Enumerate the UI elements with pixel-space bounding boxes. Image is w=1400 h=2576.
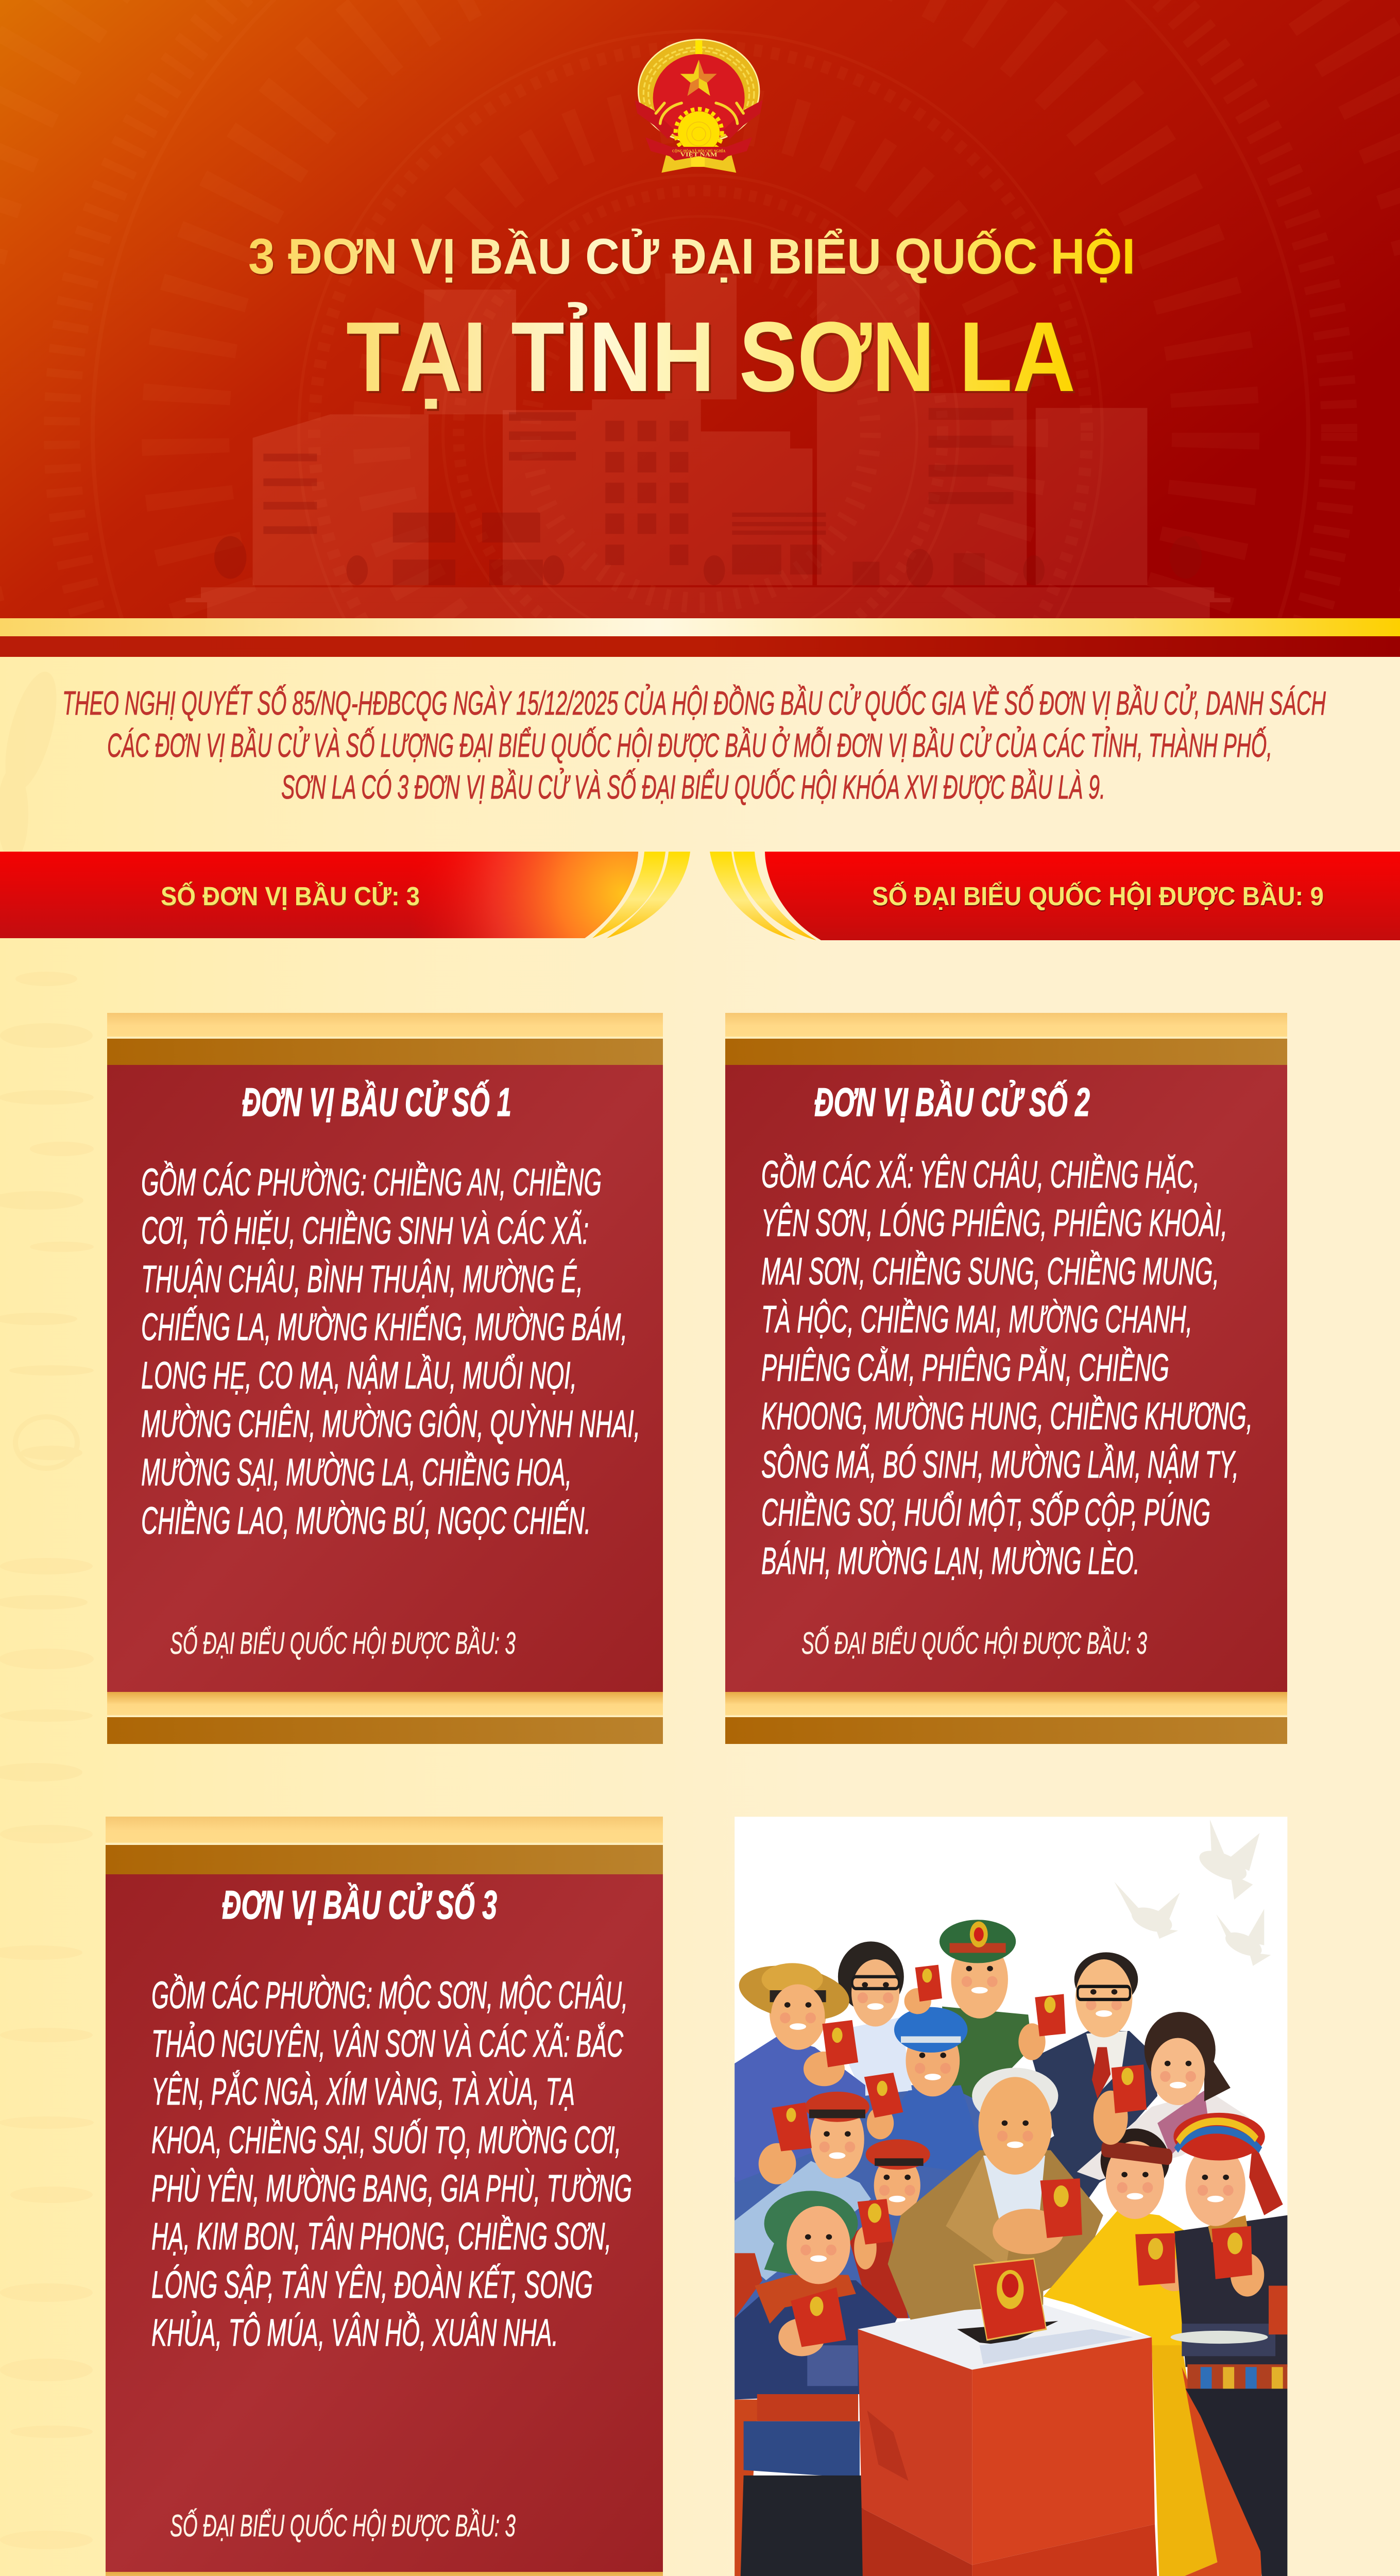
ballot box [858, 2304, 1159, 2576]
panel 1 body: CHIẾNG LA, MƯỜNG KHIẾNG, MƯỜNG BÁM, [141, 1306, 627, 1348]
national emblem: CỘNG HÒA XÃ HỘI CHỦ NGHĨA [672, 148, 726, 153]
small boy [848, 2210, 909, 2318]
national emblem: VIỆT NAM [680, 151, 718, 158]
panel 3 body: KHOA, CHIỀNG SẠI, SUỐI TỌ, MƯỜNG CƠI, [151, 2119, 621, 2161]
hands [759, 1988, 1128, 2269]
base [661, 155, 736, 173]
star [680, 60, 716, 96]
doves [1114, 1820, 1271, 1966]
banner [645, 138, 752, 161]
left ethnic woman [735, 2191, 897, 2576]
panel 1 body: CHIỀNG LAO, MƯỜNG BÚ, NGỌC CHIẾN. [141, 1499, 591, 1542]
panel 1 body: CƠI, TÔ HIỆU, CHIỀNG SINH VÀ CÁC XÃ: [141, 1209, 589, 1252]
red stripe [0, 636, 1400, 657]
right ribbon: number of deputies: SỐ ĐẠI BIỂU QUỐC HỘI ĐƯỢC BẦU: 9 [872, 881, 1324, 911]
gold stripe [0, 618, 1400, 636]
soldier [942, 2007, 1032, 2102]
left drum pattern background [0, 667, 94, 2576]
panel: constituency 2 [725, 1013, 1287, 1744]
helmet worker [878, 2085, 981, 2172]
panel: constituency 3 [106, 1817, 663, 2576]
yellow dress woman [1043, 2128, 1264, 2576]
suit man [1032, 2031, 1157, 2166]
intro paragraph [62, 684, 1326, 806]
building silhouette [186, 266, 1231, 618]
ribbons [635, 100, 675, 139]
drum pattern rings [0, 0, 1400, 1195]
left ribbon: number of constituencies: SỐ ĐƠN VỊ BẦU CỬ: 3 [161, 881, 420, 911]
title line 2: TẠI TỈNH SƠN LA [346, 301, 1075, 412]
panel 3 body: GỒM CÁC PHƯỜNG: MỘC SƠN, MỘC CHÂU, [151, 1974, 628, 2016]
panel 2 heading: ĐƠN VỊ BẦU CỬ SỐ 2 [814, 1079, 1090, 1125]
woman right [1077, 2091, 1249, 2180]
right ethnic woman [1171, 2113, 1287, 2576]
panel 3 body: HẠ, KIM BON, TÂN PHONG, CHIỀNG SƠN, [151, 2215, 611, 2258]
panel 1 body: LONG HẸ, CO MẠ, NẬM LẦU, MUỔI NỌI, [141, 1354, 577, 1397]
panel 3 body: LÓNG SẬP, TÂN YÊN, ĐOÀN KẾT, SONG [151, 2263, 593, 2306]
panel 2 body [761, 1153, 1253, 1582]
woman glasses [833, 2018, 912, 2096]
old man in tan jacket [888, 2068, 1103, 2324]
illustration: voters around ballot box [735, 1817, 1287, 2576]
panel 2 footer: SỐ ĐẠI BIỂU QUỐC HỘI ĐƯỢC BẦU: 3 [801, 1626, 1147, 1660]
panel 3 heading: ĐƠN VỊ BẦU CỬ SỐ 3 [222, 1882, 497, 1927]
panel 1 heading: ĐƠN VỊ BẦU CỬ SỐ 1 [242, 1079, 511, 1125]
panel 1 body: MƯỜNG SẠI, MƯỜNG LA, CHIỀNG HOA, [141, 1451, 572, 1494]
crowd underlay [735, 2085, 1171, 2318]
header banner [0, 0, 1400, 618]
panel 3 body: PHÙ YÊN, MƯỜNG BANG, GIA PHÙ, TƯỜNG [151, 2167, 632, 2210]
panel 1 footer: SỐ ĐẠI BIỂU QUỐC HỘI ĐƯỢC BẦU: 3 [170, 1626, 516, 1660]
booklet entering box [974, 2259, 1046, 2340]
panel 2 body: BÁNH, MƯỜNG LẠN, MƯỜNG LÈO. [761, 1539, 1140, 1582]
page background [0, 657, 1400, 2576]
gear [676, 109, 722, 156]
red booklets [772, 1965, 1252, 2347]
panel 3 body: KHỦA, TÔ MÚA, VÂN HỒ, XUÂN NHA. [151, 2311, 558, 2354]
panel 1 body [141, 1161, 640, 1542]
panel 3 body: THẢO NGUYÊN, VÂN SƠN VÀ CÁC XÃ: BẮC [151, 2022, 623, 2065]
red cap boy [735, 2161, 871, 2280]
national emblem [635, 40, 763, 173]
panel 3 body [151, 1974, 632, 2354]
panel 1 body: GỒM CÁC PHƯỜNG: CHIỀNG AN, CHIỀNG [141, 1161, 602, 1204]
left ribbon: number of constituencies [0, 852, 690, 938]
right ribbon: number of deputies [710, 852, 1400, 940]
panel 3 body: YÊN, PẮC NGÀ, XÍM VÀNG, TÀ XÙA, TẠ [151, 2070, 575, 2113]
panel: constituency 1 [107, 1013, 663, 1744]
panel 1 body: MƯỜNG CHIÊN, MƯỜNG GIÔN, QUỲNH NHAI, [141, 1402, 640, 1445]
panel 1 body: THUẬN CHÂU, BÌNH THUẬN, MƯỜNG É, [141, 1258, 583, 1300]
panel 3 footer: SỐ ĐẠI BIỂU QUỐC HỘI ĐƯỢC BẦU: 3 [170, 2509, 516, 2543]
rice [656, 103, 743, 124]
straw hat man [735, 2036, 865, 2183]
back row people [735, 1920, 1249, 2318]
title line 1: 3 ĐƠN VỊ BẦU CỬ ĐẠI BIỂU QUỐC HỘI [248, 228, 1135, 284]
